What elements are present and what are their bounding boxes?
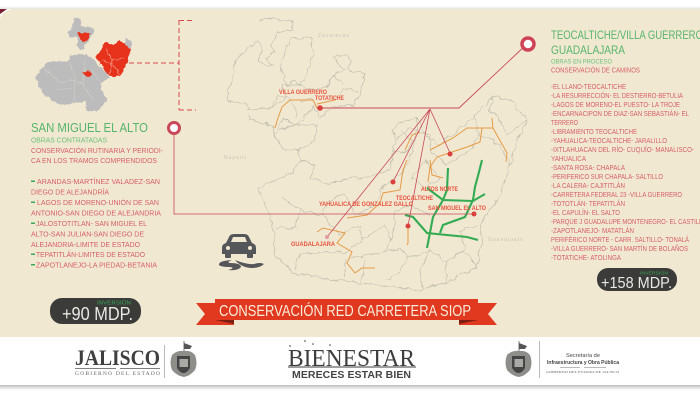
text block: San Miguel el Alto: CONSERVACIÓN RUTINARIA Y PERIODI- — [31, 146, 164, 155]
investment pill: +158 MDP: +158 MDP. — [601, 275, 672, 292]
title ribbon — [196, 299, 497, 325]
list: Teocaltiche sections: -PERIFERICO SUR CHAPALA- SALTILLO — [551, 174, 663, 181]
icon: SIOP crest — [506, 341, 532, 377]
text block: San Miguel el Alto — [31, 120, 164, 165]
investment pill: +158 MDP — [597, 268, 677, 292]
list: Teocaltiche sections: -EL LLANO-TEOCALTICHE — [551, 84, 626, 91]
logo: Jalisco: GOBIERNO DEL ESTADO — [75, 371, 160, 377]
list: San Miguel el Alto sections: ANTONIO-SAN DIEGO DE ALEJANDRIA — [31, 210, 161, 218]
dashed connector — [129, 20, 196, 110]
text block: Teocaltiche heading: CONSERVACIÓN DE CAMINOS — [551, 66, 640, 74]
list: Teocaltiche sections: -SANTA ROSA- CHAPALA — [551, 165, 625, 172]
list: San Miguel el Alto sections: ALEJANDRIA-LIMITE DE ESTADO — [31, 242, 141, 249]
text block: Teocaltiche heading: GUADALAJARA — [551, 43, 625, 57]
list: San Miguel el Alto sections: TEPATITLÁN-LIMITES DE ESTADO — [36, 250, 146, 259]
list: San Miguel el Alto sections: ALTO-SAN JULIAN-SAN DIEGO DE — [31, 232, 144, 238]
ring marker: left — [168, 122, 180, 134]
map place labels: YAHUALICA DE GONZALEZ GALLO — [319, 201, 413, 208]
neighbouring state labels: Nayarit — [224, 155, 247, 161]
map place labels: SAN MIGUEL EL ALTO — [428, 205, 486, 212]
list: Teocaltiche sections: -EL CAPULÍN- EL SALTO — [551, 208, 620, 217]
list: Teocaltiche sections: -YAHUALICA-TEOCALTICHE- JARALILLO — [551, 138, 667, 145]
logo: Secretaría de Infraestructura y Obra Pública — [539, 341, 620, 378]
map place labels: GUADALAJARA — [291, 241, 335, 248]
locator map of Jalisco — [35, 18, 132, 111]
text block: Teocaltiche heading: OBRAS EN PROCESO — [551, 58, 612, 66]
ring marker: right — [522, 38, 534, 50]
logo: Secretaría de Infraestructura y Obra Pública: Infraestructura y Obra Pública — [547, 360, 620, 366]
investment pill: +90 MDP: +90 MDP. — [62, 304, 133, 324]
text block: San Miguel el Alto: SAN MIGUEL EL ALTO — [31, 120, 148, 135]
neighbouring state labels — [224, 33, 524, 243]
list: San Miguel el Alto sections — [31, 177, 161, 270]
text block: San Miguel el Alto: CA EN LOS TRAMOS COMPRENDIDOS — [31, 158, 157, 165]
logo: Bienestar: BIENESTAR — [288, 346, 415, 372]
list: San Miguel el Alto sections: ARANDAS-MARTÍNEZ VALADEZ-SAN — [37, 177, 160, 186]
map place labels: ALTOS NORTE — [421, 186, 459, 193]
list: San Miguel el Alto sections: LAGOS DE MORENO-UNIÓN DE SAN — [37, 198, 159, 207]
logo: Bienestar — [288, 340, 416, 381]
neighbouring state labels: Guanajuato — [488, 237, 524, 243]
corner tab — [0, 9, 7, 14]
map place labels: VILLA GUERRERO — [279, 89, 327, 96]
map place labels: TEOCALTICHE — [396, 195, 434, 202]
list: Teocaltiche sections: -TOTOTLÁN- TEPATITLÁN — [551, 199, 625, 208]
icon: skidding car — [219, 234, 264, 270]
list: San Miguel el Alto sections: DIEGO DE ALEJANDRÍA — [31, 188, 109, 196]
map place labels: TOTATICHE — [315, 95, 345, 102]
list: Teocaltiche sections — [551, 84, 700, 262]
title ribbon: CONSERVACIÓN RED CARRETERA SIOP — [219, 303, 471, 320]
green roads — [405, 160, 485, 248]
investment pill: +90 MDP — [50, 298, 141, 324]
list: Teocaltiche sections: TERRERO — [551, 120, 578, 127]
investment pill: +90 MDP: INVERSIÓN — [97, 300, 131, 306]
main road map — [227, 19, 527, 290]
text block: Teocaltiche heading — [551, 28, 700, 74]
investment pill: +158 MDP: INVERSIÓN — [640, 270, 669, 276]
icon: Jalisco crest — [170, 341, 196, 377]
map place labels — [279, 89, 486, 248]
list: San Miguel el Alto sections: JALOSTOTITLAN- SAN MIGUEL EL — [36, 221, 147, 228]
logo: Jalisco: JALISCO — [75, 345, 160, 370]
municipal outlines — [227, 19, 527, 290]
list: Teocaltiche sections: -LIBRAMIENTO TEOCALTICHE — [551, 129, 637, 136]
leader lines and location markers — [174, 44, 527, 239]
logo: Secretaría de Infraestructura y Obra Pública: Secretaría de — [566, 353, 600, 359]
list: Teocaltiche sections: -ZAPOTLANEJO- MATATLÁN — [551, 226, 634, 235]
text block: San Miguel el Alto: OBRAS CONTRATADAS — [31, 138, 107, 144]
list: Teocaltiche sections: -TOTATICHE- ATOLINGA — [551, 255, 621, 262]
list: San Miguel el Alto sections: ZAPOTLANEJO-LA PIEDAD-BETANIA — [36, 262, 157, 270]
list: Teocaltiche sections: -LAGOS DE MORENO-EL PUESTO- LA TROJE — [551, 102, 680, 109]
list: Teocaltiche sections: -LA CALERA- CAJITITLÁN — [551, 181, 625, 190]
orange roads — [275, 100, 507, 273]
neighbouring state labels: Zacatecas — [318, 33, 350, 39]
list: Teocaltiche sections: YAHUALICA — [551, 156, 586, 163]
logo: Bienestar: MERECES ESTAR BIEN — [292, 369, 411, 381]
logo: Secretaría de Infraestructura y Obra Pública: GOBIERNO DEL ESTADO DE JALISCO — [546, 370, 620, 374]
footer band — [0, 337, 700, 385]
